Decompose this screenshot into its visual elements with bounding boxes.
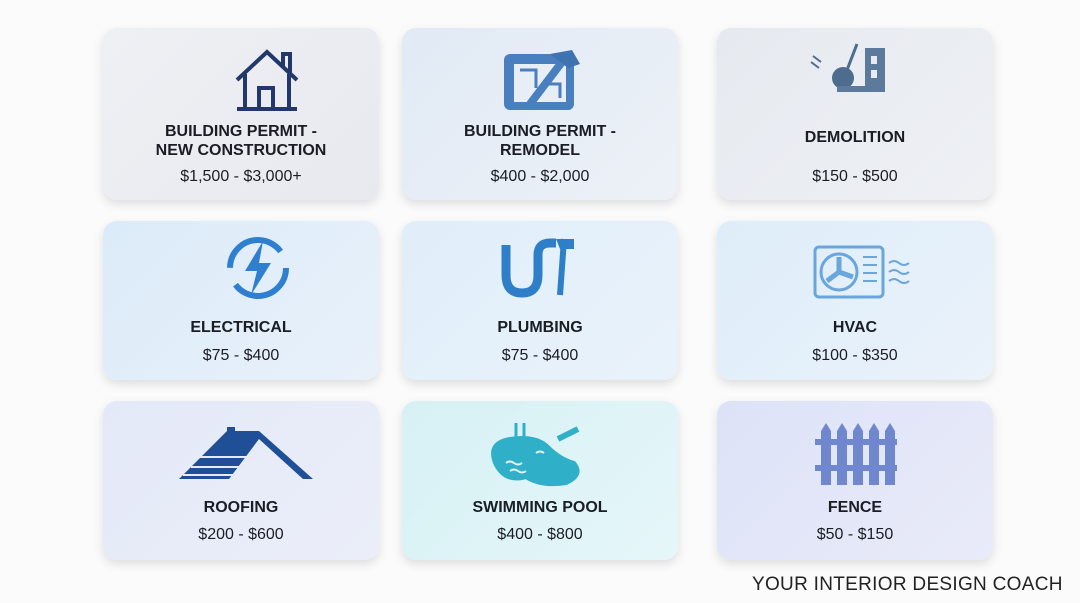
- title: BUILDING PERMIT -: [165, 123, 317, 140]
- title: HVAC: [833, 319, 877, 336]
- icon: fence: [815, 423, 897, 485]
- card: building permit new construction: [103, 28, 379, 200]
- icon: ac unit: [814, 246, 910, 298]
- card: electrical: [103, 221, 379, 380]
- title: [156, 123, 326, 159]
- title: BUILDING PERMIT -: [464, 123, 616, 140]
- card: hvac: [717, 221, 993, 380]
- icon: pipes wrench: [502, 238, 574, 298]
- title: NEW CONSTRUCTION: [156, 142, 326, 159]
- card: building permit remodel: [402, 28, 678, 200]
- title: ELECTRICAL: [190, 319, 292, 336]
- icon: house: [236, 49, 298, 111]
- title: [464, 123, 616, 159]
- price: $1,500 - $3,000+: [180, 168, 302, 185]
- price: $50 - $150: [817, 526, 893, 543]
- price: $75 - $400: [203, 347, 279, 364]
- icon: pool: [491, 423, 580, 486]
- icon: lightning: [227, 237, 289, 299]
- price: $400 - $800: [497, 526, 583, 543]
- price: $100 - $350: [812, 347, 898, 364]
- title: PLUMBING: [497, 319, 583, 336]
- card: demolition: [717, 28, 993, 200]
- card: roofing: [103, 401, 379, 560]
- icon: roof: [179, 427, 313, 479]
- card: swimming pool: [402, 401, 678, 560]
- title: DEMOLITION: [805, 129, 905, 146]
- icon: wrecking ball: [810, 44, 885, 92]
- footer brand: YOUR INTERIOR DESIGN COACH: [752, 574, 1063, 595]
- price: $150 - $500: [812, 168, 898, 185]
- icon: blueprint hammer: [504, 50, 580, 110]
- card: plumbing: [402, 221, 678, 380]
- price: $200 - $600: [198, 526, 284, 543]
- title: ROOFING: [204, 499, 278, 516]
- price: $400 - $2,000: [491, 168, 589, 185]
- price: $75 - $400: [502, 347, 578, 364]
- title: SWIMMING POOL: [472, 499, 608, 516]
- title: REMODEL: [500, 142, 580, 159]
- title: FENCE: [828, 499, 882, 516]
- card: fence: [717, 401, 993, 560]
